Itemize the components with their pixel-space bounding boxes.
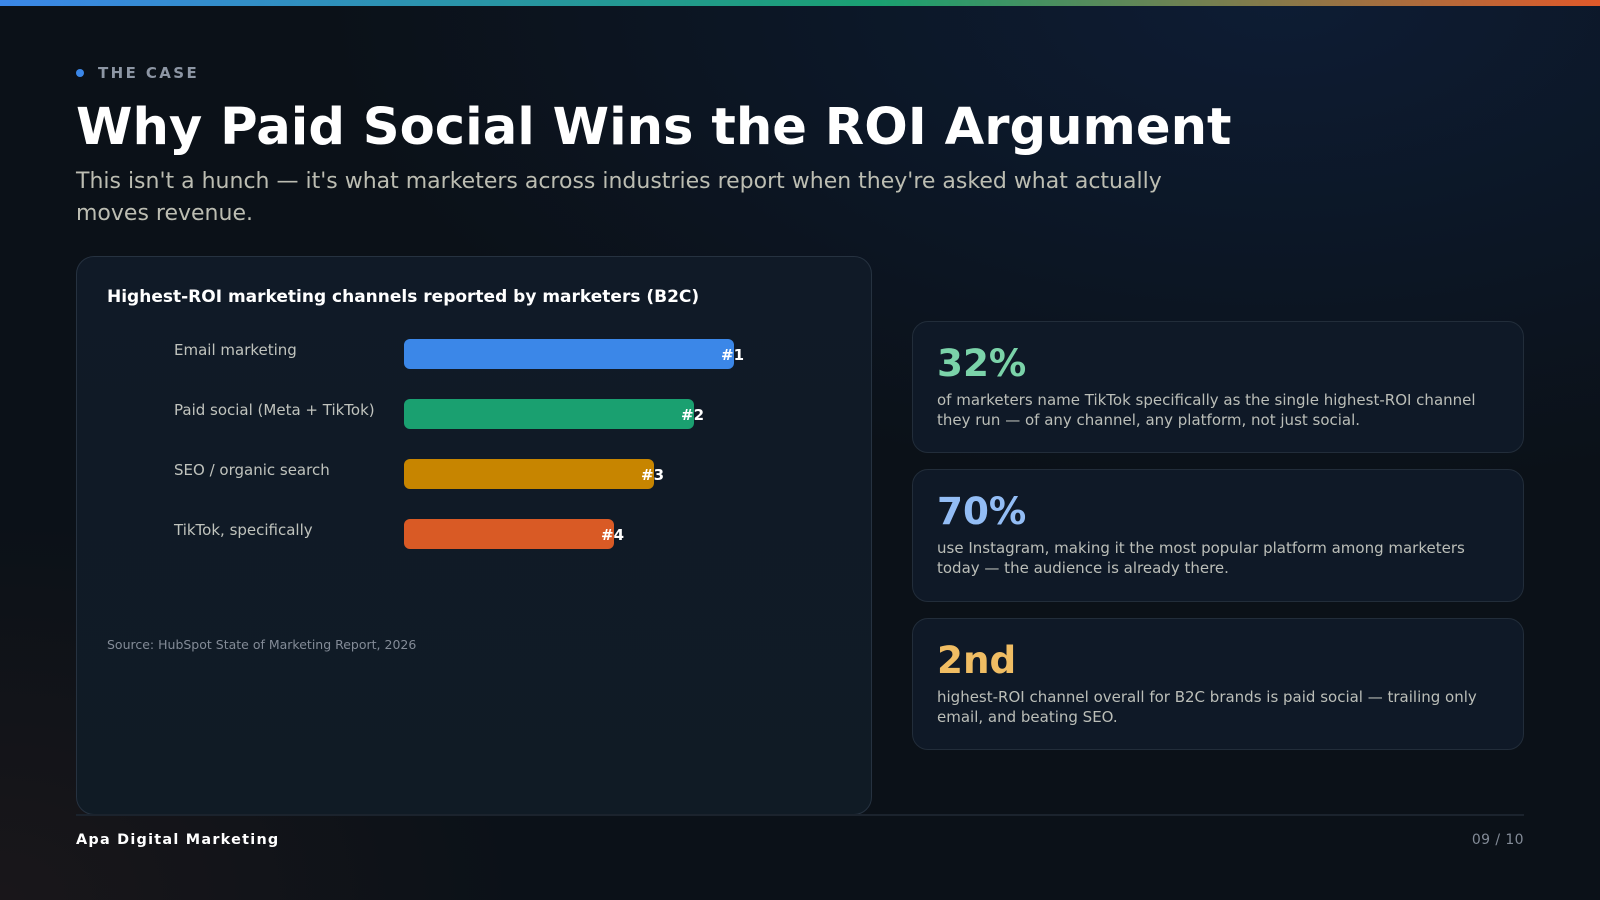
stat card 1 xyxy=(912,321,1524,453)
footer brand: Apa Digital Marketing xyxy=(76,832,279,848)
stat text: of marketers name TikTok specifically as the single highest-ROI channel xyxy=(937,391,1476,409)
row: paid social: Paid social (Meta + TikTok) xyxy=(174,401,375,419)
bar: paid social xyxy=(404,399,694,429)
stat value: 2nd xyxy=(937,638,1016,682)
bar: tiktok xyxy=(404,519,614,549)
subtitle xyxy=(76,169,1162,226)
subtitle: This isn't a hunch — it's what marketers across industries report when they're asked what actually xyxy=(76,169,1162,194)
row: email: Email marketing xyxy=(174,341,297,359)
stat text xyxy=(937,688,1477,726)
stat text xyxy=(937,539,1465,577)
stat text xyxy=(937,391,1476,429)
panel: chart xyxy=(76,256,872,815)
stat text: highest-ROI channel overall for B2C brands is paid social — trailing only xyxy=(937,688,1477,706)
stat text: they run — of any channel, any platform, not just social. xyxy=(937,411,1360,429)
stat text: use Instagram, making it the most popular platform among marketers xyxy=(937,539,1465,557)
stat card 2 xyxy=(912,469,1524,602)
rank 2: #2 xyxy=(681,406,704,424)
row: seo: SEO / organic search xyxy=(174,461,330,479)
top gradient bar xyxy=(0,0,1600,6)
bar: seo xyxy=(404,459,654,489)
title: Why Paid Social Wins the ROI Argument xyxy=(76,97,1232,157)
stat value: 70% xyxy=(937,489,1026,533)
chart heading: Highest-ROI marketing channels reported by marketers (B2C) xyxy=(107,287,699,307)
footer rule xyxy=(76,814,1524,816)
bar chart xyxy=(174,339,744,549)
eyebrow xyxy=(76,64,199,82)
stat card 3 xyxy=(912,618,1524,750)
bar: email xyxy=(404,339,734,369)
eyebrow text: THE CASE xyxy=(98,64,199,82)
page number: 09 / 10 xyxy=(1472,832,1524,848)
subtitle: moves revenue. xyxy=(76,201,253,226)
source: Source: HubSpot State of Marketing Report, 2026 xyxy=(107,637,416,652)
stat text: email, and beating SEO. xyxy=(937,708,1118,726)
rank 4: #4 xyxy=(601,526,624,544)
stat text: today — the audience is already there. xyxy=(937,559,1229,577)
rank 1: #1 xyxy=(721,346,744,364)
rank 3: #3 xyxy=(641,466,664,484)
row: tiktok: TikTok, specifically xyxy=(174,521,313,539)
stat value: 32% xyxy=(937,341,1026,385)
eyebrow dot xyxy=(76,69,84,77)
